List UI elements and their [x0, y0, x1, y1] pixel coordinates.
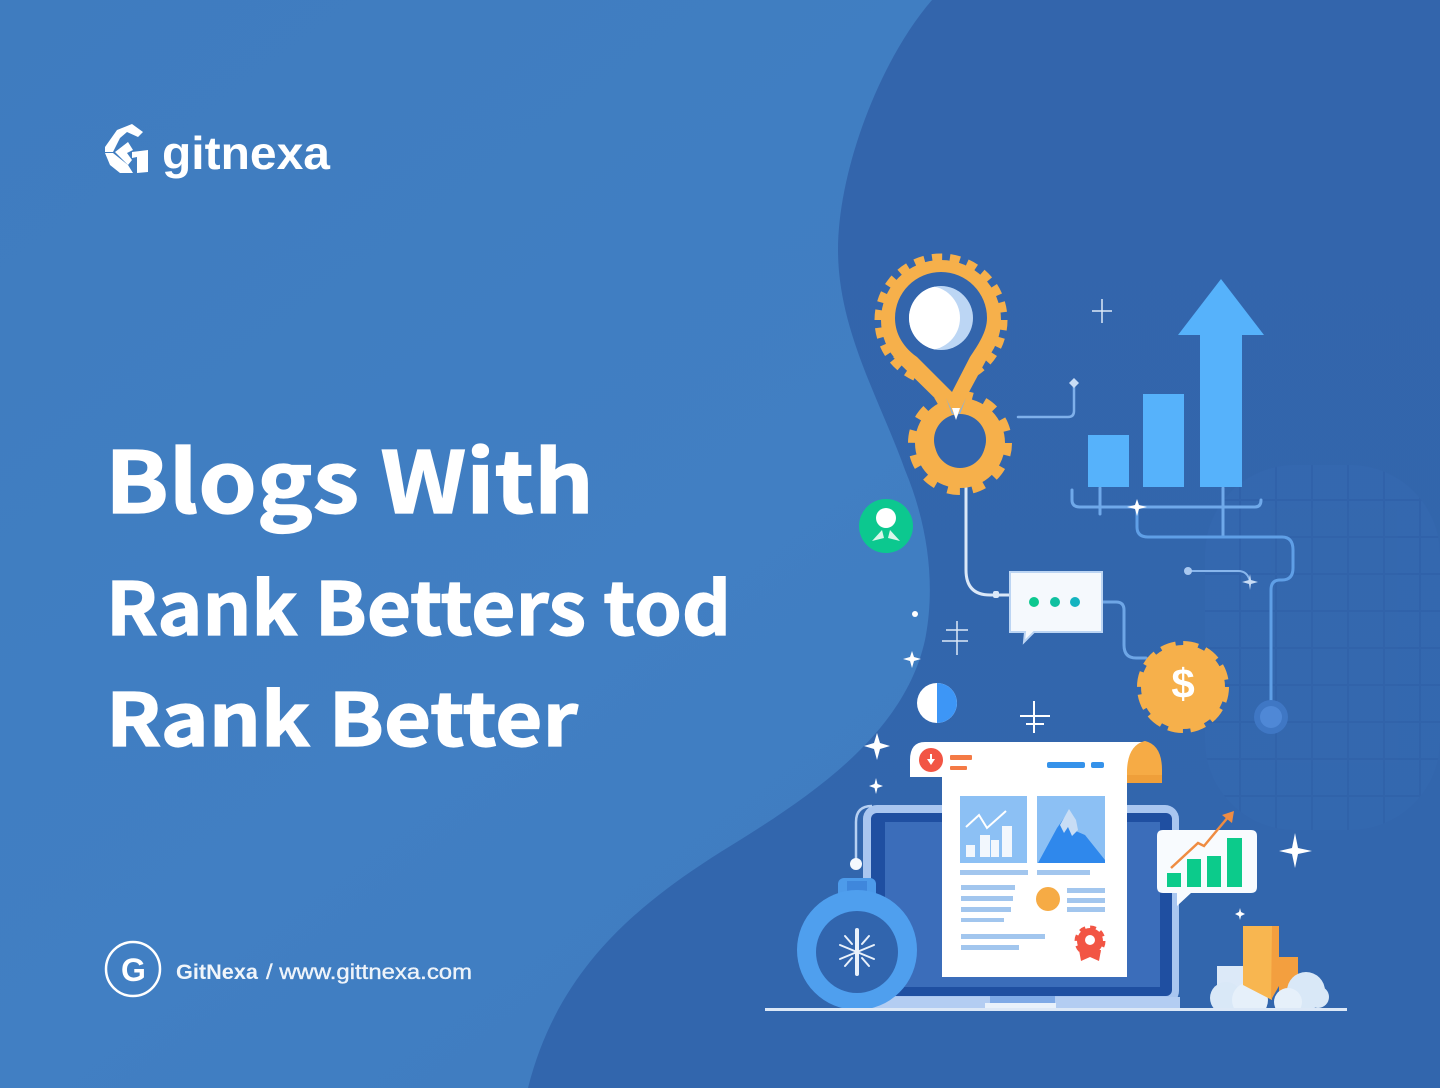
logo [105, 124, 330, 179]
icon: green user badge [859, 499, 913, 553]
stopwatch body [838, 878, 876, 902]
dark wave panel [528, 0, 1440, 1088]
wire [856, 806, 872, 860]
icon: dollar badge: $ [1171, 660, 1195, 707]
blue header bars [1047, 762, 1104, 768]
image tile: chart [960, 796, 1027, 863]
logo wordmark: gitnexa [162, 127, 330, 179]
green bars [1167, 838, 1242, 887]
connector nodes [993, 378, 1192, 598]
footer icon: G [121, 952, 146, 988]
stopwatch snowflake [840, 930, 874, 974]
orange blocks and clouds [1210, 926, 1329, 1008]
icon: node circle [1254, 700, 1288, 734]
chat bubble [1010, 572, 1102, 642]
chart bubble [1157, 811, 1257, 906]
title line 3: Rank Better [106, 662, 578, 768]
bar chart with arrow [1088, 279, 1264, 487]
document text lines [960, 870, 1105, 950]
red badge [1076, 927, 1104, 961]
document page [910, 742, 1146, 977]
footer [106, 942, 472, 996]
sparkles [864, 499, 1312, 920]
icon: location pin gear [879, 258, 1003, 418]
logo mark [105, 124, 148, 173]
paper roll [1127, 741, 1162, 783]
footer icon [106, 942, 160, 996]
icon: lower gear [913, 396, 1007, 490]
connector lines [966, 384, 1293, 705]
icon: dollar badge [1140, 644, 1226, 730]
orange dot [1036, 887, 1060, 911]
blog document [910, 741, 1162, 977]
thin cross sparkles [942, 299, 1112, 733]
ground line [765, 1008, 1347, 1011]
title line 2: Rank Betters tod [106, 551, 731, 657]
image tile: mountain [1037, 796, 1105, 863]
footer url text: / www.gittnexa.com [266, 961, 472, 984]
orange trend arrow [1171, 816, 1229, 868]
footer brand text: GitNexa [176, 961, 258, 984]
laptop [860, 805, 1180, 1009]
clouds [1210, 972, 1329, 1008]
title [105, 415, 731, 768]
stopwatch [797, 806, 917, 1010]
title line 1: Blogs With [105, 415, 594, 538]
icon: half circle [917, 683, 957, 723]
faint grid pattern [1205, 465, 1440, 830]
red header icon [919, 748, 972, 772]
